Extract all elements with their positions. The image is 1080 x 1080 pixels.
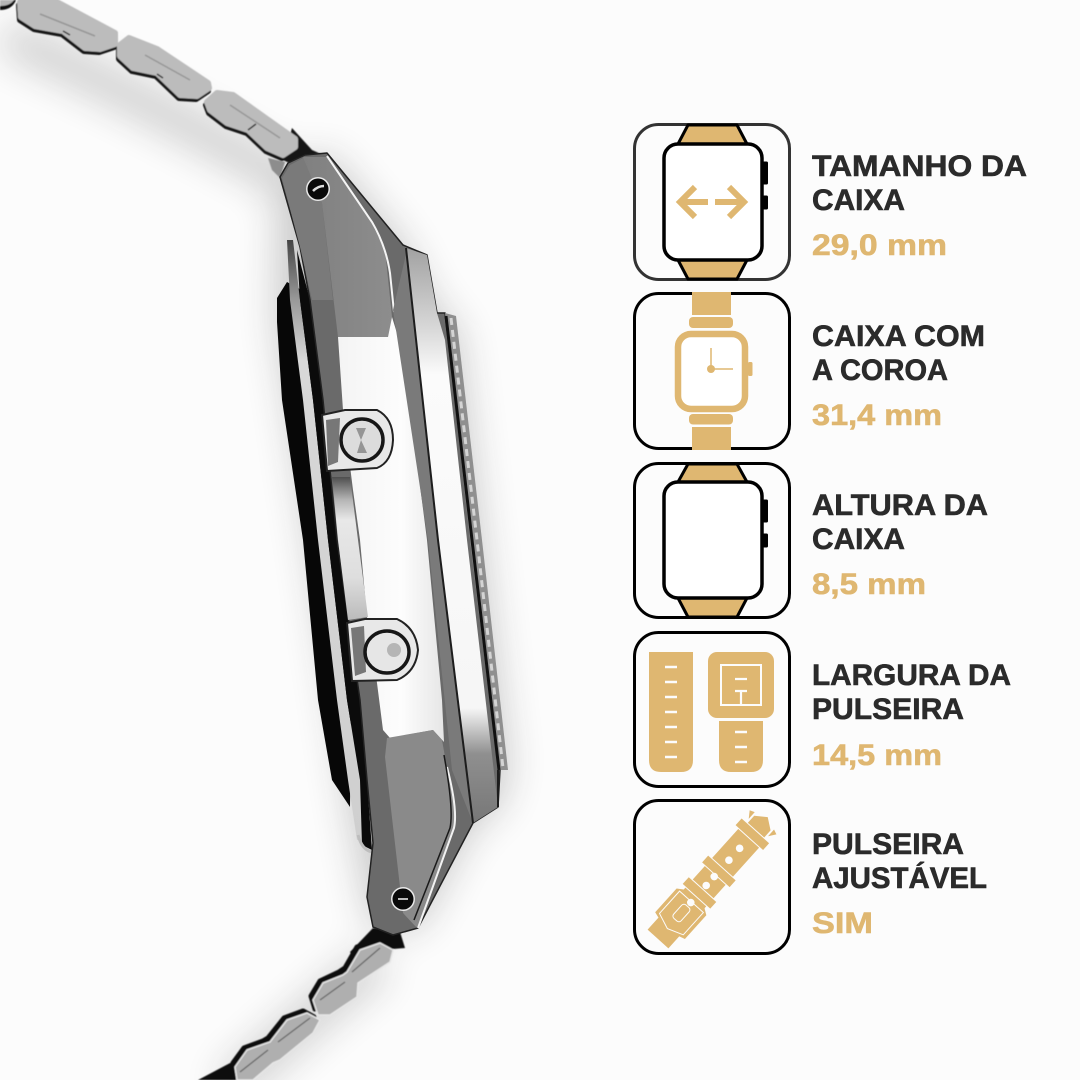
panel: case with crown: [634, 292, 985, 450]
lower bracelet links: [198, 928, 405, 1080]
label: case with crown: 31,4 mm: [812, 399, 942, 432]
bottom screw: [391, 887, 415, 911]
icon: buckled strap: [634, 800, 790, 954]
icon: watch with width arrows: [634, 124, 790, 280]
label: case height: ALTURA DA: [812, 489, 988, 522]
icon: gold watch with hands: [634, 292, 790, 450]
label: adjustable strap: AJUSTÁVEL: [812, 861, 987, 895]
panel: case size: [634, 124, 1027, 280]
right band dark line: [406, 248, 473, 823]
top lug lighter area: [282, 157, 333, 300]
black back cover: [277, 282, 352, 807]
watch photo: side view of the case and bracelet: [0, 0, 508, 1080]
dark line between strip and case: [297, 250, 372, 850]
label: case with crown: [812, 320, 985, 432]
top screw: [306, 177, 330, 201]
label: case height: 8,5 mm: [812, 568, 926, 601]
upper grey panel: [303, 157, 392, 337]
label: adjustable strap: PULSEIRA: [812, 828, 964, 861]
centre bright panel: [338, 317, 444, 742]
lower white highlight curve: [418, 767, 455, 928]
curled back edge at the bottom: [358, 835, 372, 852]
icon: watch front: [634, 464, 790, 618]
label: case size: TAMANHO DA: [812, 150, 1027, 183]
label: strap width: PULSEIRA: [812, 693, 964, 726]
label: adjustable strap: [812, 828, 987, 940]
label: case height: [812, 489, 988, 601]
label: case size: 29,0 mm: [812, 229, 947, 262]
lower grey panel: [385, 730, 455, 928]
label: adjustable strap: SIM: [812, 907, 873, 940]
upper lug with rivet: [322, 410, 393, 471]
panel: strap width: [634, 632, 1011, 786]
label: case size: [812, 150, 1027, 262]
label: case height: CAIXA: [812, 523, 905, 556]
grey band between panels: [393, 250, 473, 823]
label: strap width: [812, 659, 1011, 772]
panel: adjustable strap: [634, 800, 987, 954]
upper white highlight curve: [327, 156, 394, 312]
case body: [280, 153, 500, 935]
label: case with crown: CAIXA COM: [812, 320, 985, 353]
case back edge strip: [287, 240, 362, 840]
right textured bezel strip: [445, 313, 508, 807]
label: strap width: 14,5 mm: [812, 739, 942, 772]
lower lug with rivet: [347, 619, 418, 681]
upper bracelet links: [0, 0, 330, 178]
strip between lugs: [332, 477, 368, 620]
label: strap width: LARGURA DA: [812, 659, 1011, 692]
label: case size: CAIXA: [812, 184, 905, 217]
drop shadow behind watch: [6, 36, 508, 1080]
icon: two strap pieces: [634, 632, 790, 786]
right light panel: [406, 248, 498, 823]
panel: case height: [634, 464, 988, 618]
label: case with crown: A COROA: [812, 354, 948, 387]
